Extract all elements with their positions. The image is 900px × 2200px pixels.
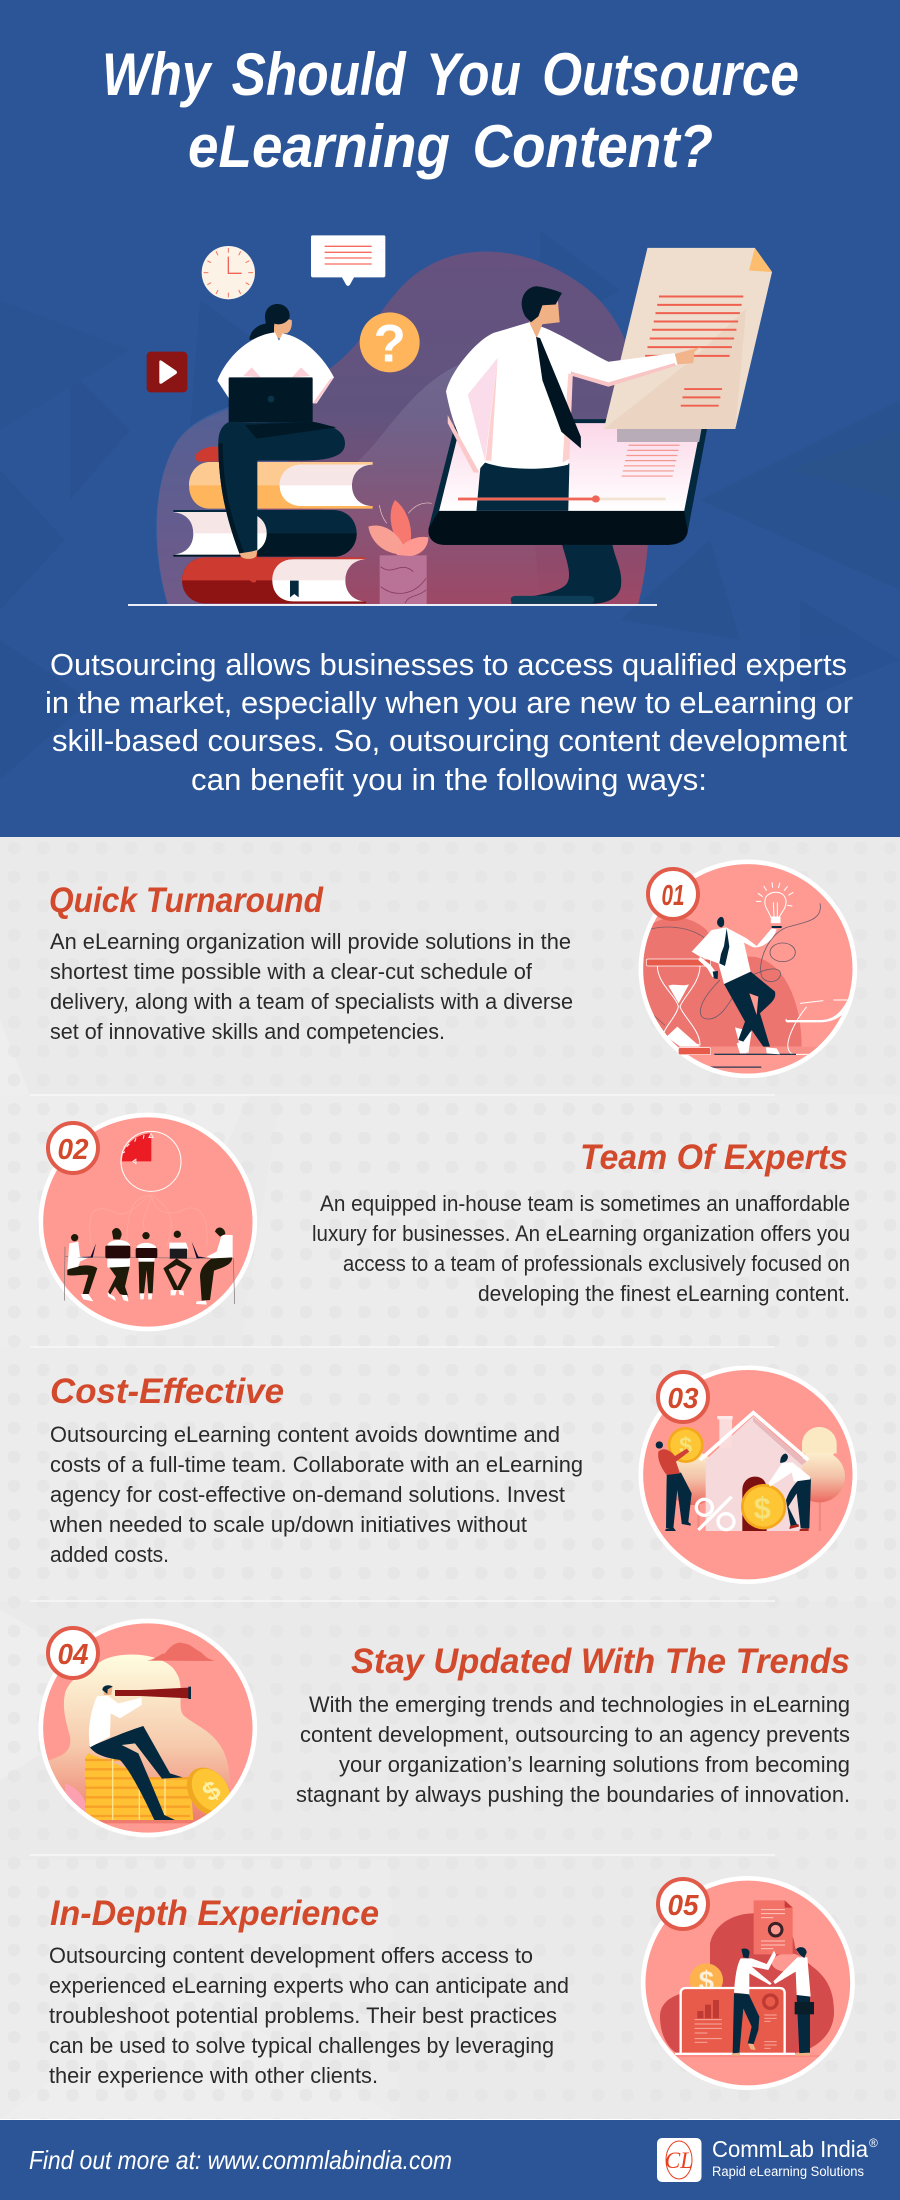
document shadow (617, 429, 701, 442)
light wave (300, 355, 540, 605)
body text: Quick Turnaround: An eLearning organization will provide solutions in the (50, 929, 571, 954)
body text: Quick Turnaround: shortest time possible with a clear-cut schedule of (50, 959, 533, 984)
woman with coin (768, 1454, 811, 1531)
intro paragraph: in the market, especially when you are new to eLearning or (45, 685, 853, 720)
man with light bulb (692, 917, 782, 1054)
number badge 03 (658, 1372, 708, 1422)
document fold (749, 248, 772, 272)
panel: Stay Updated With The Trends (38, 1619, 850, 1837)
body text: Team Of Experts: luxury for businesses. An eLearning organization offers you (312, 1221, 850, 1246)
body text: In-Depth Experience: can be used to solve typical challenges by leveraging (49, 2033, 554, 2058)
trees (666, 1427, 845, 1531)
panel: blue header background (0, 0, 900, 837)
person 2 (105, 1228, 130, 1302)
book: navy (173, 510, 357, 557)
footer link text: Find out more at: www.commlabindia.com (29, 2145, 452, 2175)
title: Why Should You Outsource (102, 41, 799, 108)
man left (731, 1949, 776, 2056)
intro paragraph (45, 647, 853, 797)
illustration: house, coins and people (638, 1365, 857, 1584)
pot with plant (368, 500, 432, 604)
question mark icon: ? (374, 314, 406, 373)
body text: In-Depth Experience: their experience with other clients. (49, 2063, 378, 2088)
body text: In-Depth Experience: troubleshoot potential problems. Their best practices (49, 2003, 557, 2028)
number badge 03: 03 (668, 1383, 698, 1415)
ground line (128, 604, 657, 606)
panel: Quick Turnaround (49, 859, 857, 1080)
number badge 04 (48, 1628, 98, 1678)
heading: Cost-Effective: Cost-Effective (50, 1372, 284, 1411)
question mark icon (360, 312, 420, 373)
coin: $ (699, 1966, 714, 1997)
body text: Team Of Experts (312, 1191, 850, 1306)
number badge 04: 04 (58, 1639, 88, 1671)
body text: Stay Updated With The Trends: content development, outsourcing to an agency prevents (300, 1722, 850, 1747)
intro paragraph: skill-based courses. So, outsourcing content development (52, 723, 847, 758)
timer (121, 1131, 181, 1191)
monitor base (511, 596, 594, 604)
body text: Stay Updated With The Trends (296, 1692, 850, 1807)
man with coin (656, 1441, 692, 1531)
body text: Cost-Effective: costs of a full-time team. Collaborate with an eLearning (50, 1452, 583, 1477)
speech bubble icon (311, 235, 385, 286)
progress bar (458, 495, 666, 503)
number badge 01 (648, 869, 698, 919)
book: orange (189, 462, 373, 509)
presenter head (529, 301, 560, 338)
monitor body (428, 419, 709, 545)
body text: Stay Updated With The Trends: With the emerging trends and technologies in eLearning (309, 1692, 850, 1717)
number badge 02: 02 (58, 1134, 88, 1166)
hourglass (646, 959, 711, 1055)
intro paragraph: can benefit you in the following ways: (191, 762, 707, 797)
background blob (157, 251, 649, 605)
laptop (675, 1988, 795, 2055)
logo wordmark (712, 2136, 878, 2179)
woman's foot (240, 552, 257, 583)
body text: Team Of Experts: access to a team of professionals exclusively focused on (343, 1251, 850, 1276)
illustration: handshake with document and laptop (641, 1876, 855, 2090)
presenter shirt (446, 322, 678, 473)
logo: CL (665, 2148, 693, 2173)
illustration: team at table with clock (38, 1113, 257, 1331)
presenter trousers (476, 461, 569, 511)
big coin (187, 1768, 230, 1814)
document text lines (645, 297, 743, 406)
woman's shirt (217, 332, 334, 403)
body text: Cost-Effective (49, 1422, 583, 1567)
document (754, 1900, 793, 1954)
table (64, 1247, 235, 1304)
body text: Cost-Effective: when needed to scale up/down initiatives without (49, 1512, 527, 1537)
body text: Quick Turnaround: set of innovative skills and competencies. (50, 1019, 445, 1044)
coin (690, 1963, 723, 1997)
percent sign (696, 1497, 734, 1530)
document (604, 248, 772, 429)
person 1 (67, 1234, 97, 1301)
man right (773, 1947, 814, 2056)
title: eLearning Content? (188, 113, 713, 180)
illustration: man with light bulb and hourglass (638, 859, 857, 1080)
large coin: $ (754, 1491, 771, 1525)
large coin (741, 1484, 786, 1529)
heading: Quick Turnaround: Quick Turnaround (49, 881, 324, 920)
small coin: $ (679, 1432, 692, 1458)
body text: In-Depth Experience (49, 1943, 569, 2088)
panel: Cost-Effective (49, 1365, 857, 1584)
woman's head (273, 317, 292, 340)
monitor stand (511, 542, 621, 604)
presenter hair (522, 286, 562, 322)
body text: Cost-Effective: added costs. (50, 1542, 169, 1567)
body text: Quick Turnaround: delivery, along with a team of specialists with a diverse (50, 989, 573, 1014)
intro paragraph: Outsourcing allows businesses to access qualified experts (50, 647, 847, 682)
body text: In-Depth Experience: experienced eLearning experts who can anticipate and (49, 1973, 569, 1998)
panel: Team Of Experts (38, 1113, 850, 1331)
woman's hair bun (249, 323, 275, 340)
person 5 (192, 1227, 233, 1305)
person 3 (136, 1232, 157, 1299)
screen text lines (622, 445, 680, 476)
panel: In-Depth Experience (49, 1876, 855, 2090)
number badge 05: 05 (668, 1890, 699, 1922)
book: red (182, 557, 366, 603)
light bulb (756, 882, 793, 923)
logo (657, 2138, 702, 2182)
heading: Team Of Experts: Team Of Experts (580, 1138, 848, 1177)
logo wordmark: CommLab India (712, 2136, 868, 2162)
house (706, 1416, 802, 1531)
panel: light grey content background (0, 837, 900, 2120)
coin stack (85, 1753, 193, 1820)
monitor screen (439, 423, 701, 511)
body text: Quick Turnaround (50, 929, 573, 1044)
woman's trousers (218, 422, 345, 555)
woman's shoe (195, 447, 218, 462)
presenter hand (675, 347, 700, 365)
big coin: $ (197, 1774, 226, 1807)
person 4 (163, 1231, 192, 1295)
woman, books, icons (147, 235, 432, 604)
title (102, 41, 799, 180)
illustration: man with telescope on coins (38, 1619, 257, 1837)
presenter tie (536, 337, 581, 448)
illustration: hero scene with woman, books, monitor and presenter (128, 235, 772, 605)
man with telescope (89, 1685, 191, 1820)
small coin (668, 1427, 704, 1463)
monitor and presenter (428, 248, 772, 604)
number badge 01: 01 (662, 880, 684, 912)
body text: Team Of Experts: An equipped in-house team is sometimes an unaffordable (320, 1191, 850, 1216)
body text: Team Of Experts: developing the finest eLearning content. (478, 1281, 850, 1306)
laptop (229, 377, 313, 422)
left light overlay (156, 390, 300, 605)
number badge 02 (48, 1123, 98, 1173)
body text: Stay Updated With The Trends: your organization’s learning solutions from becoming (339, 1752, 850, 1777)
logo wordmark: ® (869, 2136, 878, 2150)
number badge 05 (658, 1879, 708, 1929)
play button icon (147, 352, 187, 392)
heading: Stay Updated With The Trends: Stay Updated With The Trends (351, 1642, 850, 1681)
clock icon (202, 246, 255, 299)
heading: In-Depth Experience: In-Depth Experience (50, 1894, 379, 1933)
body text: Stay Updated With The Trends: stagnant by always pushing the boundaries of innovation. (296, 1782, 850, 1807)
body text: In-Depth Experience: Outsourcing content development offers access to (49, 1943, 533, 1968)
logo wordmark: Rapid eLearning Solutions (712, 2164, 864, 2179)
footer bar (0, 2119, 900, 2200)
body text: Cost-Effective: agency for cost-effective on-demand solutions. Invest (50, 1482, 565, 1507)
body text: Cost-Effective: Outsourcing eLearning content avoids downtime and (50, 1422, 560, 1447)
